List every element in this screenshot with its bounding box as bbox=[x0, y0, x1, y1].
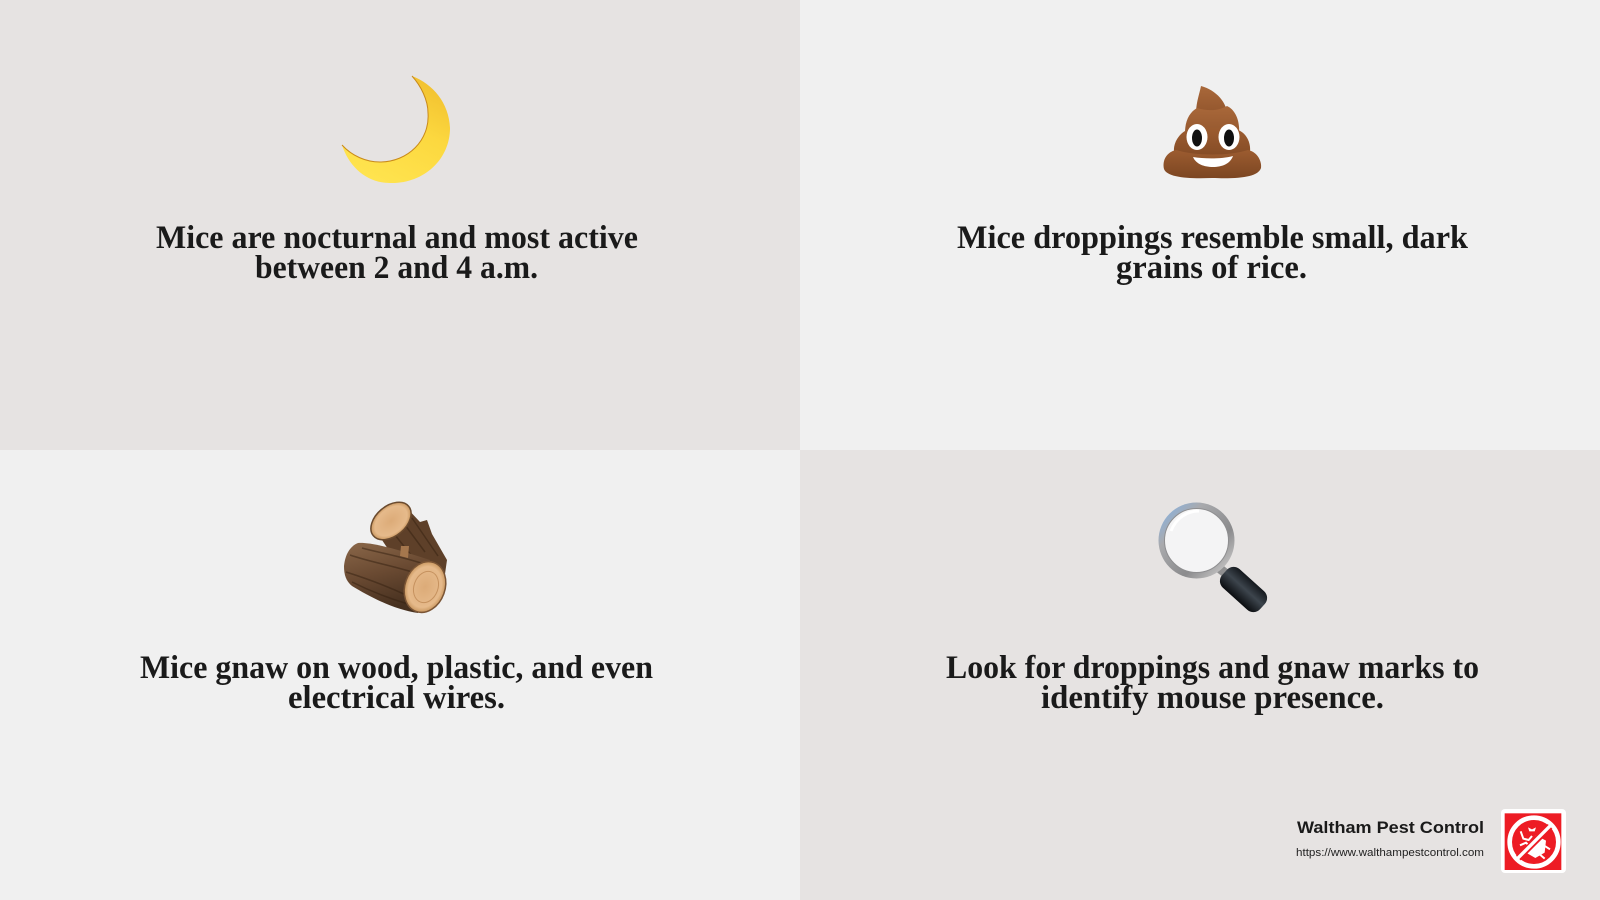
panel: gnawing bbox=[0, 450, 800, 900]
heading: identify fact: identify mouse presence. bbox=[1041, 680, 1384, 716]
brand name: Waltham Pest Control bbox=[1297, 818, 1484, 837]
heading: droppings fact: grains of rice. bbox=[1116, 250, 1307, 286]
heading: nocturnal fact: Mice are nocturnal and most active bbox=[156, 220, 638, 256]
heading: identify fact bbox=[946, 650, 1479, 716]
footer: brand bbox=[1296, 818, 1484, 859]
icon: crescent moon bbox=[342, 76, 450, 183]
panel: nocturnal bbox=[0, 0, 800, 450]
heading: gnawing fact: Mice gnaw on wood, plastic, and even bbox=[140, 650, 653, 686]
icon: wooden logs bbox=[344, 495, 453, 618]
icon: smiling poop bbox=[1164, 86, 1261, 178]
heading: nocturnal fact: between 2 and 4 a.m. bbox=[255, 250, 538, 286]
heading: nocturnal fact bbox=[156, 220, 638, 286]
brand url: https://www.walthampestcontrol.com bbox=[1296, 847, 1484, 859]
heading: droppings fact bbox=[957, 220, 1469, 286]
panel: identify bbox=[800, 450, 1600, 900]
heading: gnawing fact bbox=[140, 650, 653, 716]
heading: identify fact: Look for droppings and gnaw marks to bbox=[946, 650, 1479, 686]
panel: droppings bbox=[800, 0, 1600, 450]
heading: gnawing fact: electrical wires. bbox=[288, 680, 505, 716]
icon: magnifying glass bbox=[1158, 502, 1271, 616]
heading: droppings fact: Mice droppings resemble small, dark bbox=[957, 220, 1469, 256]
icon: pest control logo bbox=[1501, 809, 1566, 873]
